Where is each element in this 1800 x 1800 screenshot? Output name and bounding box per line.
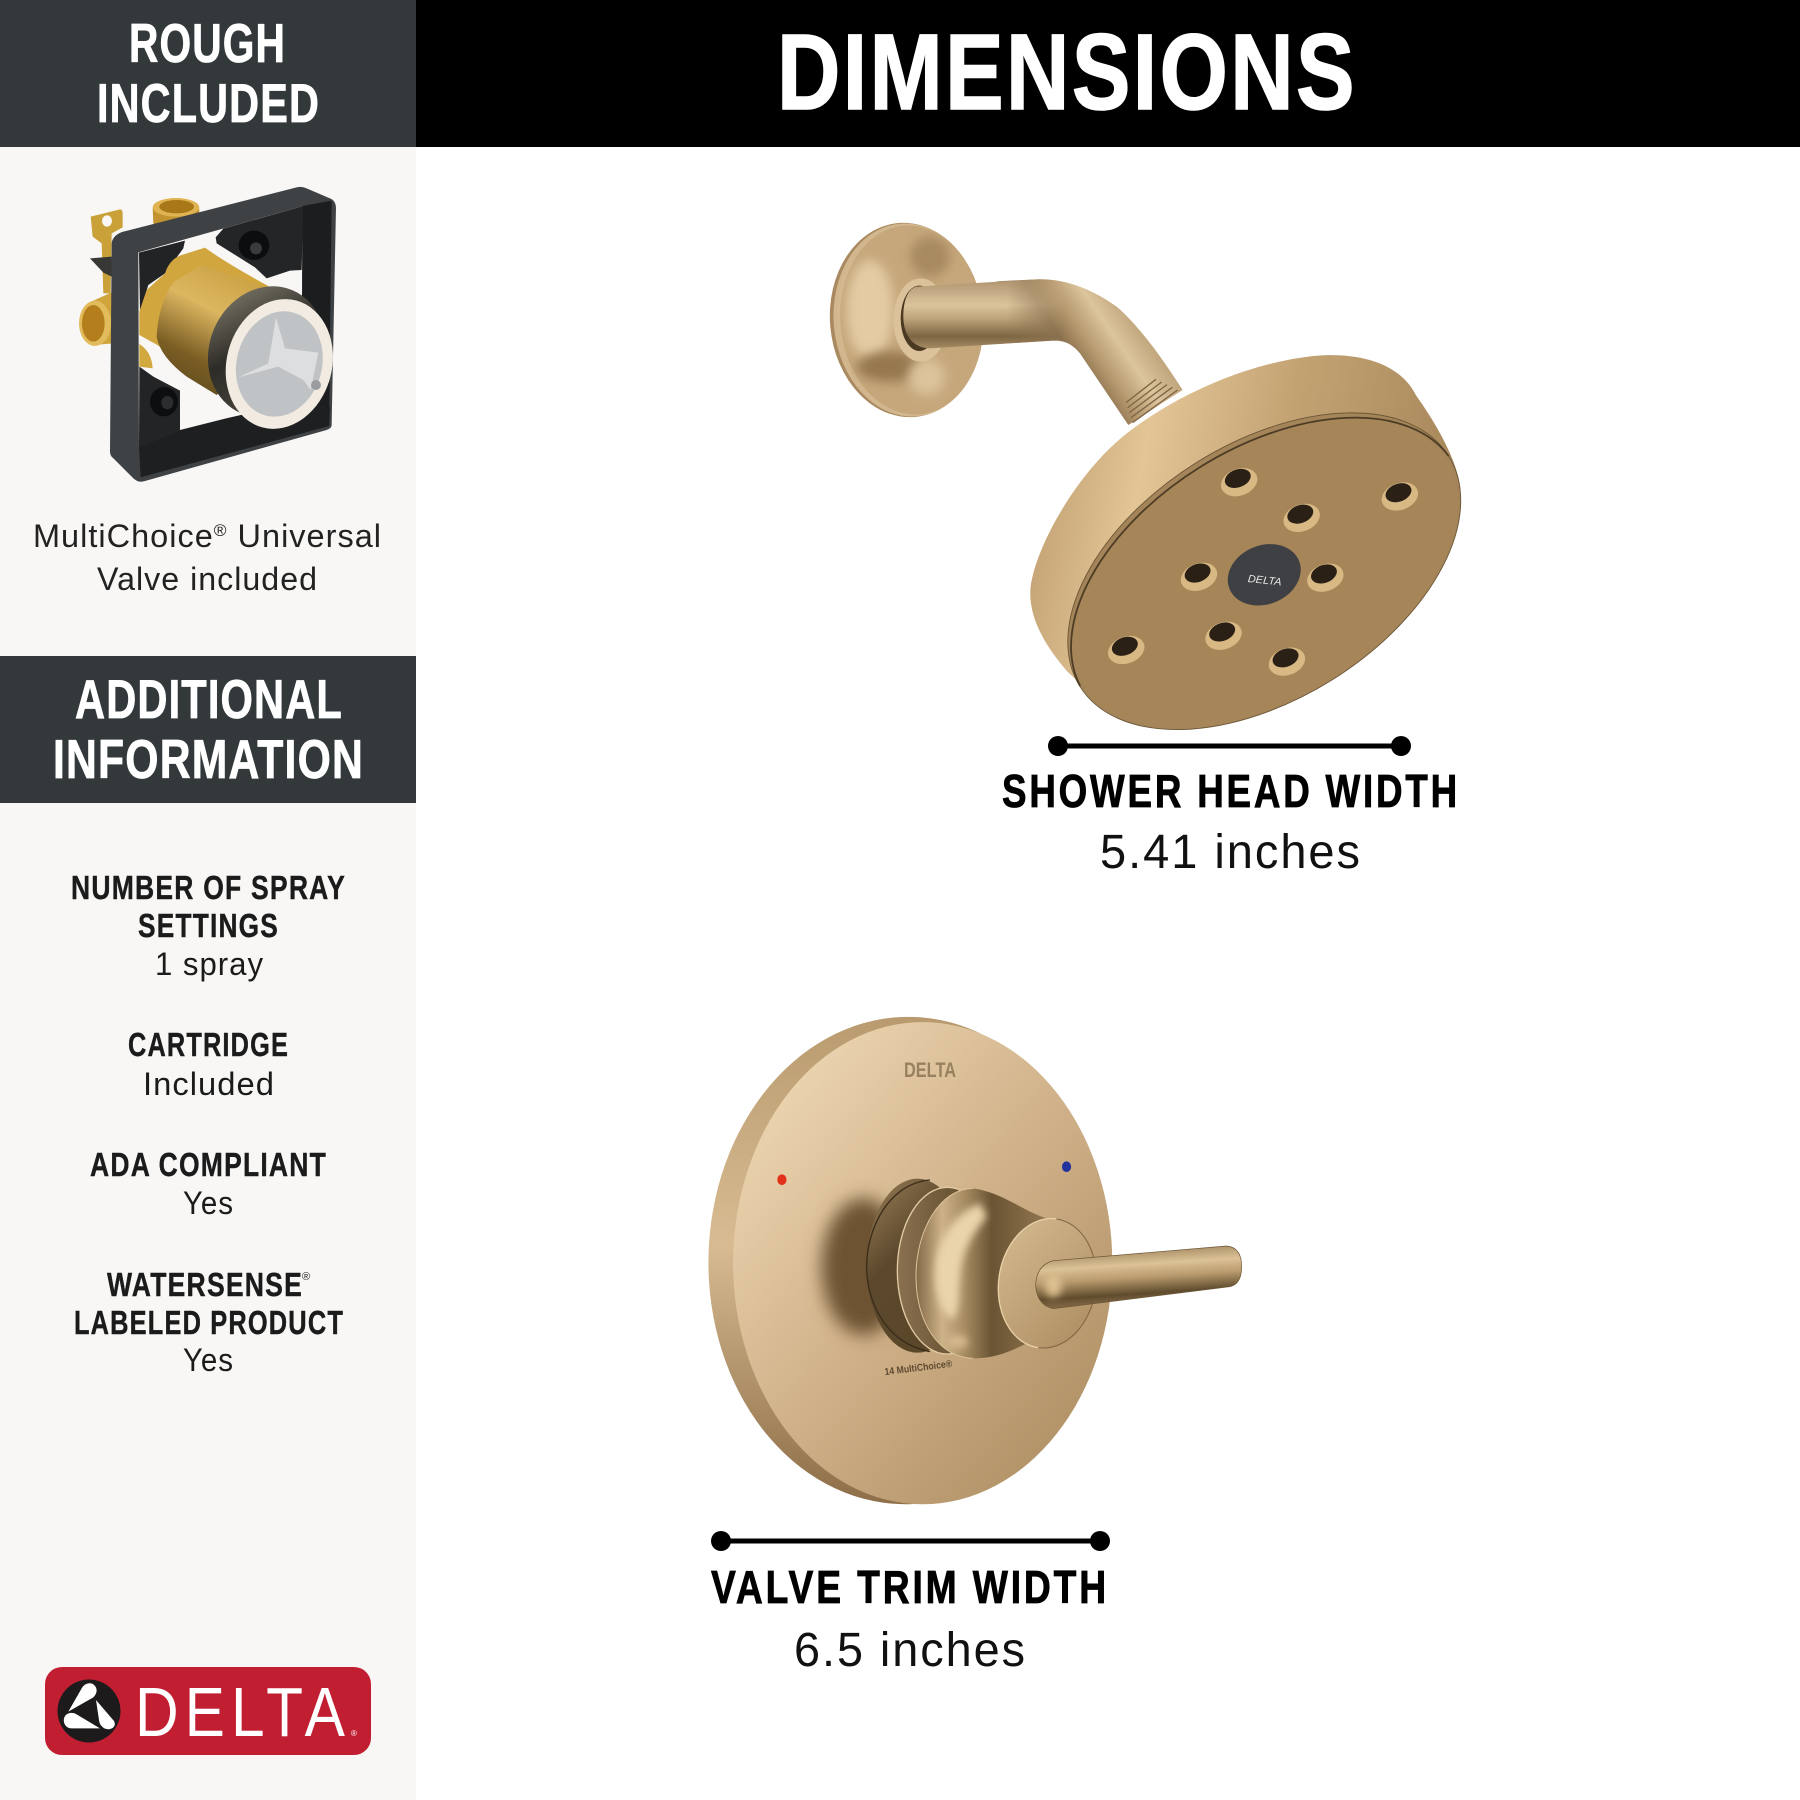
text: multichoice valve: MultiChoice (33, 518, 211, 554)
knob highlight (935, 1203, 987, 1320)
knob dome (916, 1188, 1053, 1358)
plate logo: DELTA (904, 1059, 956, 1082)
spec: watersense labeled product: WATERSENSE (107, 1266, 303, 1303)
valve cap ridges (238, 317, 318, 390)
spec: cartridge: CARTRIDGE (128, 1026, 289, 1063)
valve chrome ring (211, 287, 347, 441)
box opening (138, 206, 303, 447)
head body (1030, 355, 1461, 713)
red hot dot (777, 1174, 787, 1185)
nozzles (1104, 463, 1422, 681)
center button logo: DELTA (1247, 573, 1282, 589)
brass valve block (139, 248, 270, 353)
arm straight (903, 279, 1080, 348)
spec: watersense labeled product: ® (302, 1271, 310, 1283)
left inlet pipe (79, 292, 113, 346)
box inner right wall (302, 201, 332, 412)
arm bend (997, 279, 1183, 425)
knob base (867, 1179, 968, 1353)
brass cylinder (157, 265, 283, 395)
mounting box frame (110, 187, 336, 482)
icon: rough-in valve (79, 187, 347, 482)
lever tip highlight (1045, 1273, 1062, 1297)
head face rim (1012, 347, 1517, 795)
heading: additional information: INFORMATION (53, 728, 364, 790)
heading: additional information (0, 656, 416, 803)
text: multichoice valve: ® (214, 521, 228, 540)
knob dome edge (916, 1188, 973, 1358)
collar recess (901, 286, 938, 351)
text: multichoice valve: Valve included (97, 561, 318, 597)
product: valve trim plate (694, 1001, 1120, 1520)
lever handle (1036, 1246, 1242, 1309)
corner block bottom left (139, 367, 180, 447)
mounting bracket (90, 209, 123, 293)
spec: number of spray settings: NUMBER OF SPRAY (71, 869, 346, 906)
corner block top left (139, 241, 185, 312)
center button (1218, 533, 1310, 616)
plate edge (694, 1001, 1120, 1520)
heading: rough included: ROUGH (129, 12, 286, 74)
spec: number of spray settings (71, 869, 346, 982)
corner block top right (216, 206, 303, 278)
panel: left sidebar (0, 0, 416, 1800)
spec: watersense labeled product: Yes (183, 1342, 234, 1378)
heading: additional information: ADDITIONAL (75, 668, 343, 730)
product: valve handle (822, 1179, 1242, 1358)
flange face (832, 219, 991, 421)
label: shower head width: SHOWER HEAD WIDTH (1002, 765, 1460, 817)
spec: cartridge (128, 1026, 289, 1102)
knob shadow (822, 1198, 905, 1335)
dimension line: shower head (1048, 736, 1411, 756)
product: shower arm and flange (822, 216, 1183, 425)
title: dimensions: DIMENSIONS (777, 11, 1357, 132)
top outlet pipe (153, 198, 199, 252)
flange outer step (826, 217, 991, 423)
heading: rough included: INCLUDED (97, 72, 320, 134)
logo: delta: DELTA (135, 1673, 351, 1751)
product: shower head (1012, 347, 1517, 795)
flange collar (893, 278, 948, 362)
title: dimensions (416, 0, 1800, 147)
valve collar (189, 268, 345, 435)
value: shower head width: 5.41 inches (1100, 826, 1362, 879)
spec: ada compliant: ADA COMPLIANT (90, 1146, 327, 1183)
logo: delta (45, 1667, 371, 1755)
spec: watersense labeled product: LABELED PRODUCT (74, 1304, 344, 1341)
blue cold dot (1062, 1161, 1071, 1172)
text: multichoice valve (33, 518, 382, 597)
plate face (733, 1022, 1112, 1504)
threads (1126, 379, 1178, 423)
label: valve trim width: VALVE TRIM WIDTH (711, 1561, 1109, 1613)
flange edge (822, 216, 992, 424)
spec: watersense labeled product (74, 1266, 344, 1378)
spec: cartridge: Included (143, 1066, 275, 1102)
text: multichoice valve: Universal (228, 518, 382, 554)
logo: delta: ® (351, 1729, 357, 1738)
box inner bottom wall (139, 401, 330, 477)
spec: number of spray settings: 1 spray (155, 946, 264, 982)
value: valve trim width: 6.5 inches (794, 1624, 1027, 1677)
spec: ada compliant: Yes (183, 1185, 234, 1221)
spec: ada compliant (90, 1146, 327, 1221)
flange shading (847, 237, 950, 395)
knob base dark edge (867, 1180, 930, 1352)
cap (990, 1212, 1105, 1354)
head face edge line (1015, 352, 1449, 686)
plate marking: 14 MultiChoice® (884, 1359, 953, 1378)
brass lower tab (139, 344, 153, 368)
knob ring (897, 1187, 997, 1354)
dimension line: valve trim (711, 1531, 1110, 1551)
knob lower highlight (947, 1335, 968, 1348)
valve cap pin (311, 380, 321, 390)
valve grey cap (224, 301, 334, 427)
cap light edge (990, 1212, 1056, 1348)
heading: rough included (0, 0, 416, 147)
spec: number of spray settings: SETTINGS (138, 907, 279, 944)
head face (1018, 354, 1512, 792)
